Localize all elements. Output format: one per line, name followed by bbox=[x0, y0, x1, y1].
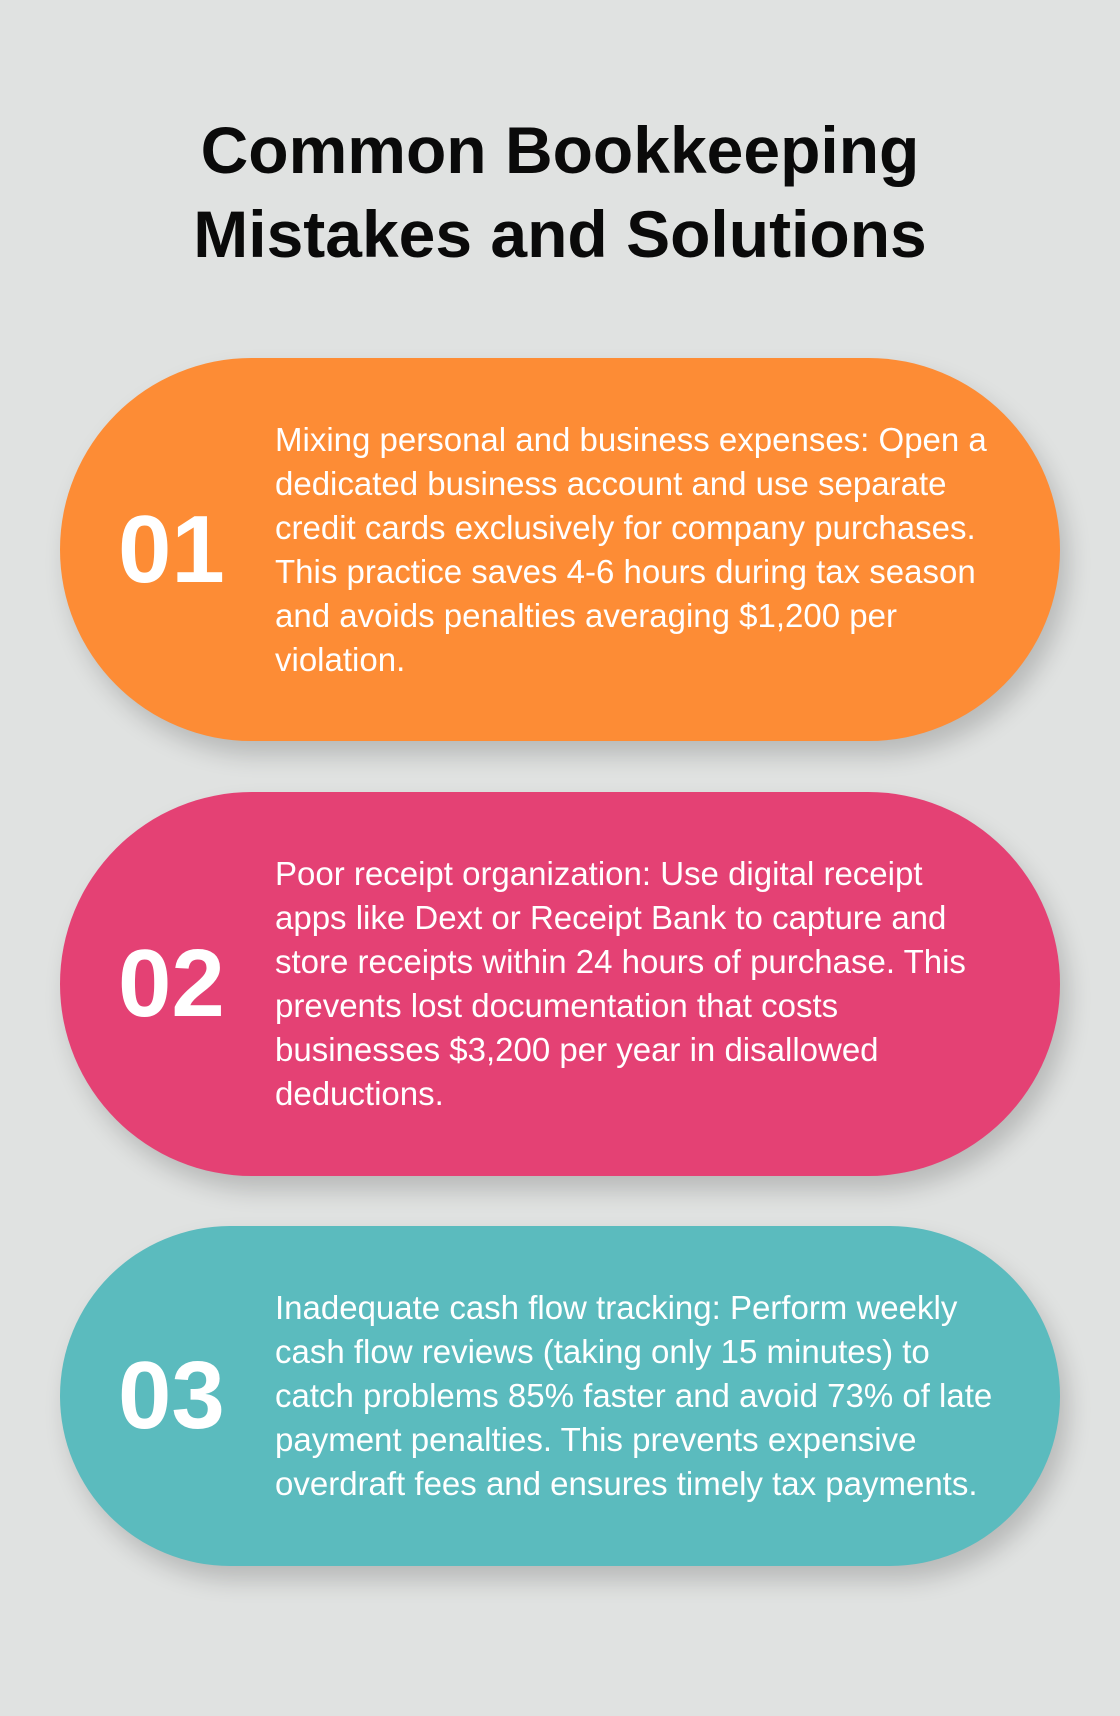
text block 03 bbox=[275, 1289, 992, 1502]
text block 02: store receipts within 24 hours of purchase. This bbox=[275, 943, 966, 980]
text block 03: payment penalties. This prevents expensive bbox=[275, 1421, 916, 1458]
text block 01: dedicated business account and use separate bbox=[275, 464, 946, 502]
text block 03: Inadequate cash flow tracking: Perform weekly bbox=[275, 1289, 957, 1326]
text block 01 bbox=[275, 420, 987, 678]
number 03: 03 bbox=[118, 1342, 225, 1449]
text block 02: apps like Dext or Receipt Bank to capture and bbox=[275, 899, 946, 936]
text block 02: businesses $3,200 per year in disallowed bbox=[275, 1031, 879, 1068]
text block 03: overdraft fees and ensures timely tax payments. bbox=[275, 1465, 978, 1502]
text block 02: prevents lost documentation that costs bbox=[275, 987, 838, 1024]
text block 02: Poor receipt organization: Use digital receipt bbox=[275, 855, 923, 892]
title: Mistakes and Solutions bbox=[193, 197, 927, 271]
text block 02: deductions. bbox=[275, 1075, 444, 1112]
panel: mistake 01 bbox=[60, 358, 1060, 741]
title: Common Bookkeeping bbox=[201, 113, 919, 187]
text block 03: cash flow reviews (taking only 15 minutes) to bbox=[275, 1333, 930, 1370]
text block 01: Mixing personal and business expenses: Open a bbox=[275, 420, 987, 458]
text block 01: credit cards exclusively for company purchases. bbox=[275, 508, 976, 546]
text block 01: This practice saves 4-6 hours during tax season bbox=[275, 552, 976, 590]
panel: mistake 03 bbox=[60, 1226, 1060, 1566]
title bbox=[193, 113, 927, 271]
text block 03: catch problems 85% faster and avoid 73% of late bbox=[275, 1377, 992, 1414]
text block 01: and avoids penalties averaging $1,200 per bbox=[275, 596, 897, 634]
text block 02 bbox=[275, 855, 966, 1112]
panel: mistake 02 bbox=[60, 792, 1060, 1176]
number 02: 02 bbox=[118, 930, 225, 1037]
number 01: 01 bbox=[118, 496, 225, 602]
text block 01: violation. bbox=[275, 640, 405, 678]
